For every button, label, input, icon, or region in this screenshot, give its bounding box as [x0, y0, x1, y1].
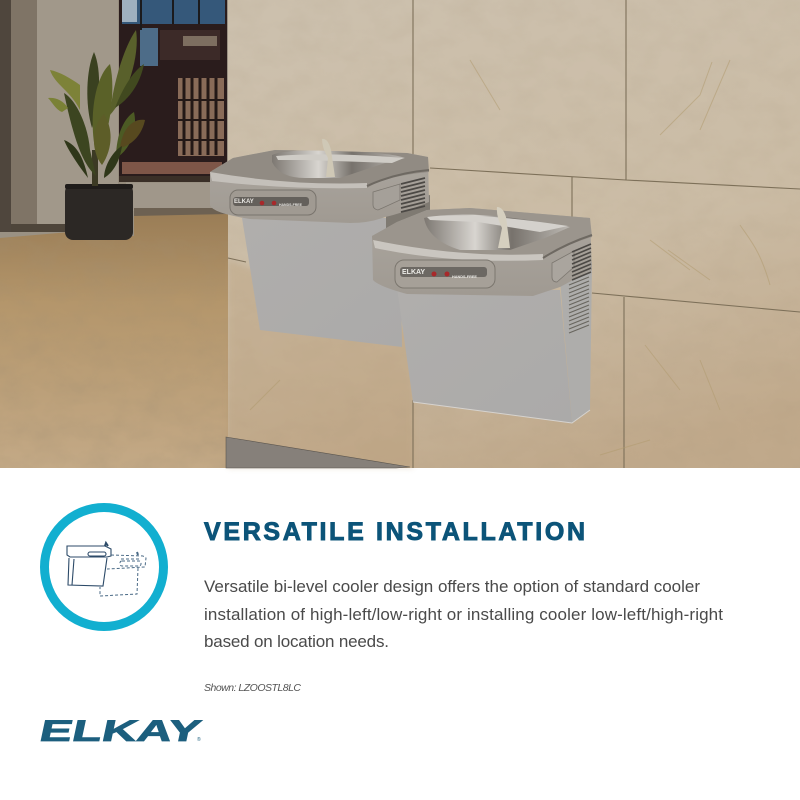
body text: Versatile bi-level cooler design offers the option of standard cooler	[204, 577, 700, 596]
logo: ELKAY: ®	[197, 736, 201, 743]
basin bowl	[272, 150, 405, 178]
stone wall tiles	[228, 0, 800, 468]
background wall and column	[0, 0, 231, 240]
body text: installation of high-left/low-right or installing cooler low-left/high-right	[204, 605, 723, 624]
fountain: upper left cooler: HANDS-FREE	[279, 203, 303, 207]
baseboard	[226, 437, 410, 468]
dashed cooler outline	[100, 552, 146, 596]
basin housing	[372, 208, 592, 296]
solid cooler outline	[67, 543, 111, 586]
basin housing	[210, 150, 429, 223]
control panel	[230, 190, 316, 215]
side vents	[572, 244, 591, 280]
side handle	[373, 184, 400, 210]
cooler body	[397, 288, 572, 423]
basin bowl	[424, 215, 570, 250]
photo: bi-level drinking fountains in lobby	[0, 0, 800, 468]
control panel	[395, 260, 495, 288]
fountain: upper left cooler	[210, 139, 430, 347]
logo: ELKAY: ELKAY	[37, 714, 204, 748]
planter	[48, 30, 145, 240]
floor	[0, 214, 228, 468]
fountain: lower right cooler: HANDS-FREE	[452, 275, 477, 279]
side vent	[401, 178, 425, 212]
side handle	[552, 251, 574, 282]
bubbler spout	[497, 207, 510, 248]
window with city view	[119, 0, 227, 182]
fountain: lower right cooler: ELKAY	[402, 269, 425, 276]
bubbler spout	[322, 139, 335, 177]
icon: installation options circle	[44, 508, 164, 626]
cooler body	[242, 218, 402, 347]
model note: Shown: LZOOSTL8LC	[204, 682, 301, 694]
fountain: lower right cooler	[372, 207, 592, 423]
heading: VERSATILE INSTALLATION	[204, 518, 585, 546]
body text: based on location needs.	[204, 632, 389, 651]
fountain: upper left cooler: ELKAY	[234, 199, 254, 205]
